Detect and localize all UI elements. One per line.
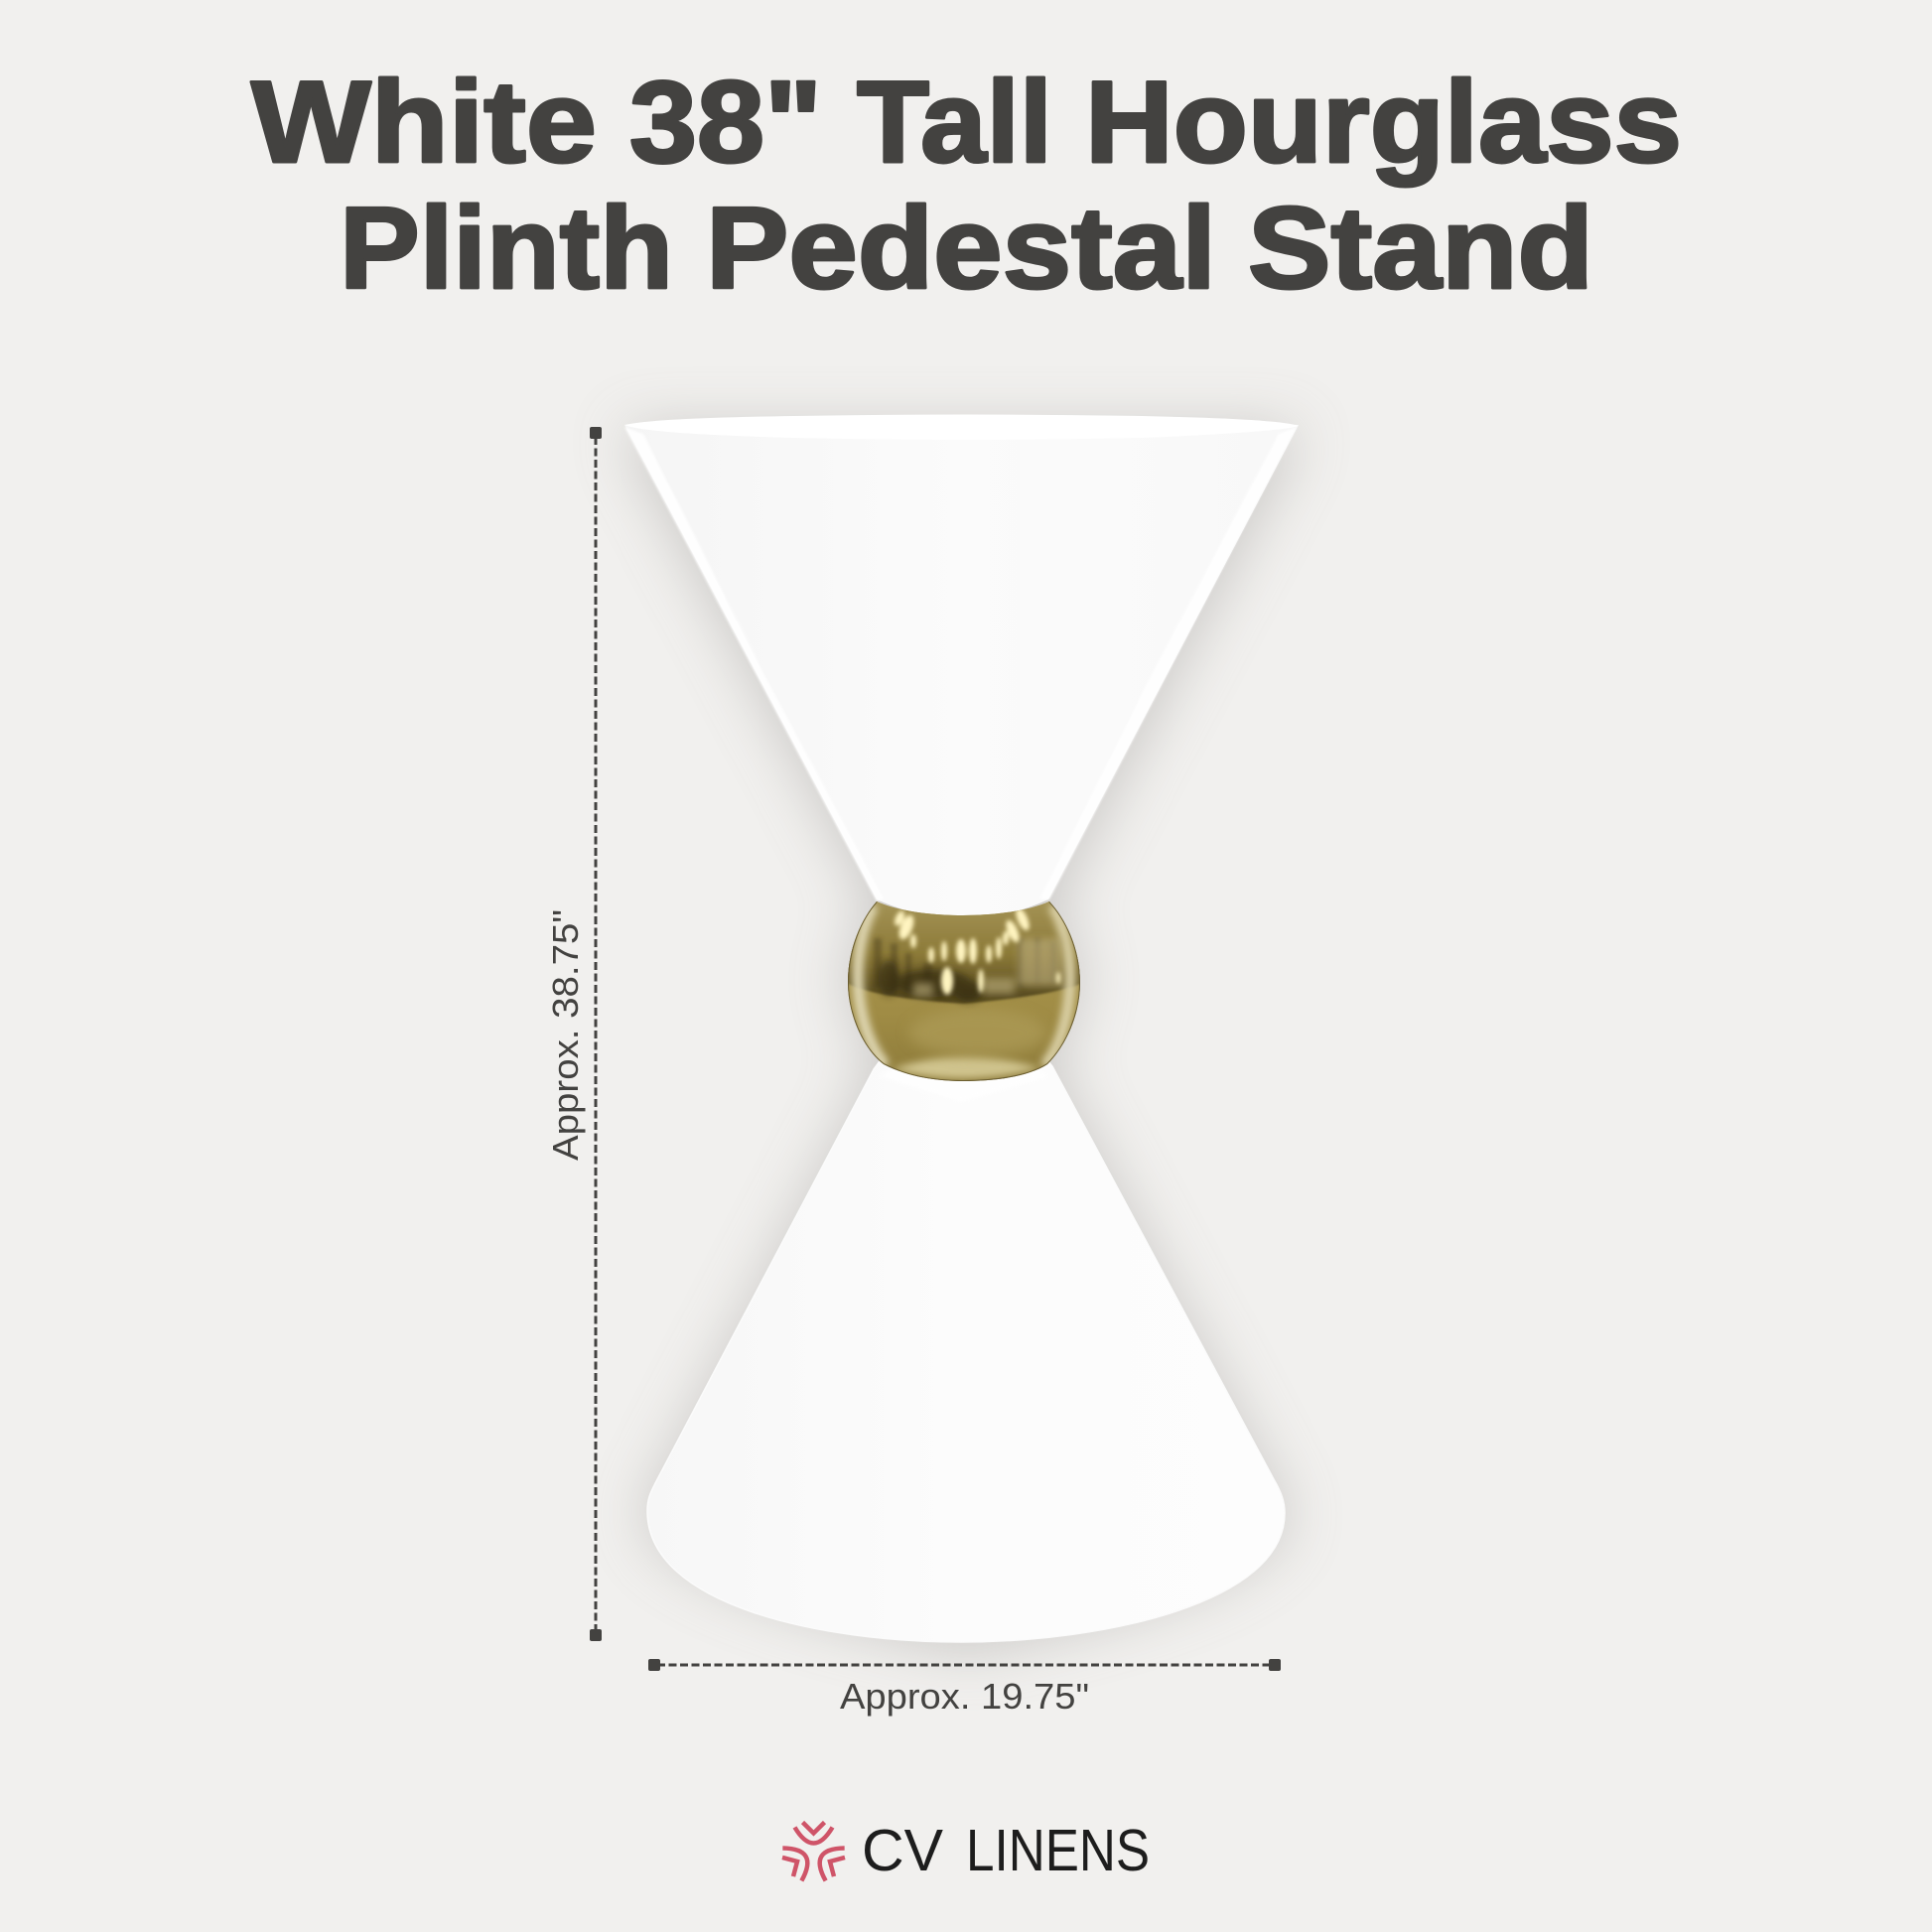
sphere outline shading bbox=[848, 901, 1080, 1081]
infographic canvas bbox=[249, 75, 1678, 1882]
width dimension line bbox=[648, 1659, 1281, 1671]
title: Hourglass bbox=[1085, 57, 1682, 187]
height dimension line bbox=[590, 427, 602, 1641]
reflection dark patches bbox=[879, 960, 982, 1002]
top cone bbox=[624, 419, 1299, 919]
pedestal soft shadow bbox=[621, 429, 1303, 1652]
height label: Approx. 38.75" bbox=[545, 909, 586, 1161]
warm reflection band bbox=[913, 938, 1062, 997]
width label: Approx. 19.75" bbox=[840, 1676, 1089, 1717]
title: Tall bbox=[857, 57, 1052, 187]
brand name bbox=[862, 1818, 1150, 1883]
hourglass pedestal bbox=[624, 415, 1299, 1642]
title: Pedestal bbox=[706, 183, 1216, 313]
specular highlights bbox=[893, 906, 1060, 995]
title: White bbox=[251, 57, 597, 187]
gold sphere bbox=[848, 901, 1080, 1081]
brand name: CV bbox=[862, 1818, 944, 1883]
title bbox=[251, 57, 1682, 313]
brand logo bbox=[778, 1818, 1150, 1883]
icon: CV Linens mark bbox=[778, 1823, 849, 1883]
vertical streak reflections bbox=[874, 938, 1056, 993]
bright lower crescent bbox=[892, 1056, 1040, 1078]
title: Plinth bbox=[340, 183, 673, 313]
brand name: LINENS bbox=[966, 1818, 1150, 1883]
top cone rim bbox=[624, 415, 1299, 440]
lower gold glow bbox=[908, 1009, 1047, 1056]
title: Stand bbox=[1248, 183, 1593, 313]
side rim light bbox=[858, 905, 1070, 1066]
bottom cone bbox=[647, 1042, 1285, 1642]
title: 38" bbox=[629, 57, 822, 187]
